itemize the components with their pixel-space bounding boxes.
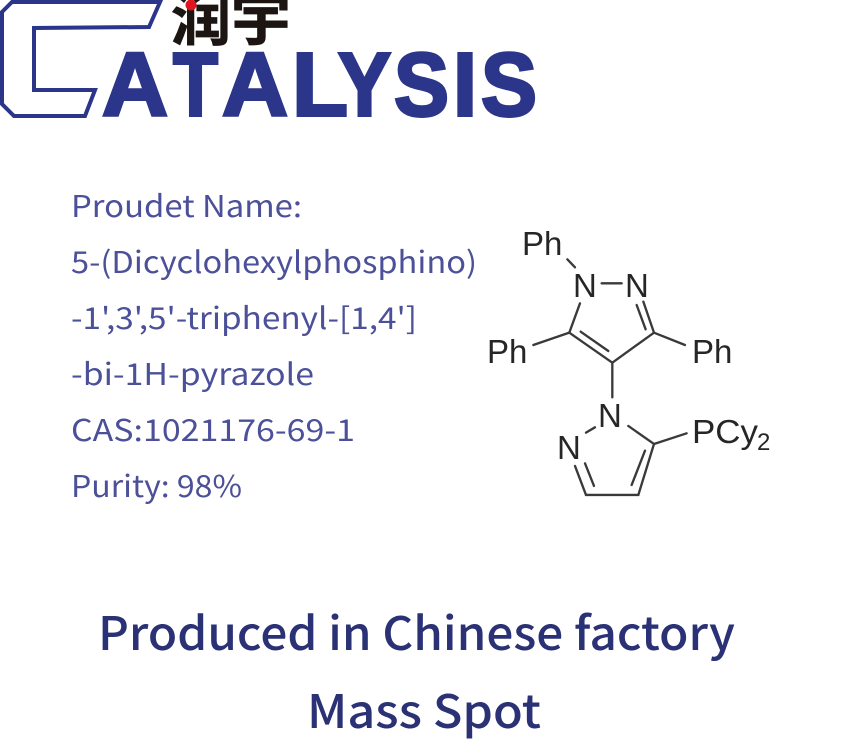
logo: ATALYSIS wordmark: T: [173, 36, 218, 136]
structure atom labels: PCy: [692, 413, 759, 450]
purity: Purity: 98%: [71, 462, 242, 506]
logo: [2, 0, 537, 136]
tagline: produced in Chinese factory: Produced in Chinese factory: [98, 598, 735, 664]
product name line 1: 5-(Dicyclohexylphosphino): [71, 238, 477, 282]
structure atom labels: [487, 225, 770, 466]
structure atom labels: Ph: [487, 333, 527, 370]
product details text block: [71, 182, 477, 506]
structure atom labels: Ph: [522, 225, 562, 262]
CAS number: CAS:1021176-69-1: [71, 406, 355, 450]
chemical structure: [487, 225, 770, 495]
logo: ATALYSIS wordmark: L: [292, 36, 348, 136]
tagline: mass spot: Mass Spot: [307, 676, 541, 742]
structure atom labels: N: [573, 267, 597, 304]
logo: ATALYSIS wordmark: A: [222, 36, 288, 136]
structure atom labels: 2: [757, 429, 770, 456]
product name line 3: -bi-1H-pyrazole: [71, 350, 314, 394]
logo: ATALYSIS wordmark: S: [394, 36, 449, 136]
structure bonds: [533, 259, 687, 495]
logo: red dot: [186, 0, 196, 10]
structure atom labels: N: [557, 429, 581, 466]
logo: ATALYSIS wordmark: [102, 36, 537, 136]
tagline: [98, 598, 735, 742]
structure atom labels: N: [625, 267, 649, 304]
logo: ATALYSIS wordmark: A: [102, 36, 168, 136]
structure atom labels: Ph: [692, 333, 732, 370]
logo: ATALYSIS wordmark: S: [481, 36, 537, 136]
logo: ATALYSIS wordmark: Y: [338, 36, 391, 136]
logo: C outline mark: [2, 2, 160, 116]
structure atom labels: N: [598, 397, 622, 434]
product name line 2: -1',3',5'-triphenyl-[1,4']: [71, 294, 417, 338]
product name label: Proudet Name:: [71, 182, 302, 226]
logo: ATALYSIS wordmark: I: [453, 36, 477, 136]
